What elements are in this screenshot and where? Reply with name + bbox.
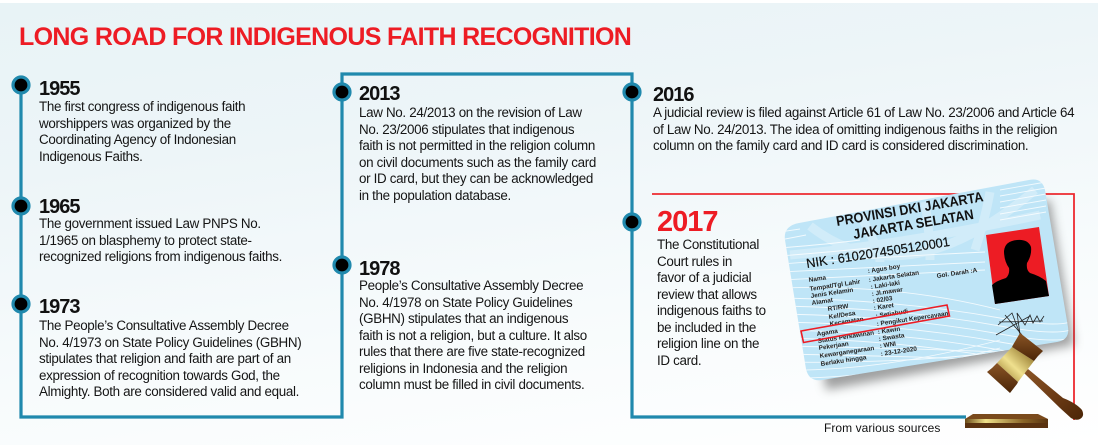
ID card illustration and gavel — [784, 180, 1084, 428]
text 2013: on civil documents such as the family card — [359, 155, 596, 170]
year 1978: 1978 — [359, 258, 400, 280]
text 2013: in the population database. — [359, 188, 511, 203]
text 1978 — [359, 278, 587, 392]
text 2017: religion line on the — [657, 336, 759, 351]
source note: From various sources — [824, 421, 940, 435]
text 1978: column must be filled in civil documents. — [359, 377, 584, 392]
event 1965 — [39, 196, 282, 264]
card fields: : Agus boy — [867, 263, 901, 275]
text 1955: The first congress of indigenous faith — [39, 99, 245, 114]
text 2017: Court rules in — [657, 254, 732, 269]
NIK number: NIK : 6102074505120001 — [805, 234, 951, 271]
text 2013: or ID card, but they can be acknowledged — [359, 171, 593, 186]
text 2017: favor of a judicial — [657, 270, 751, 285]
event 2016 — [653, 84, 1074, 153]
card fields: Jenis Kelamin — [810, 287, 854, 300]
text 1955: worshippers was organized by the — [39, 116, 231, 131]
card fields: Status Perkawinan — [817, 330, 875, 345]
card fields: : 02/03 — [872, 295, 893, 305]
card fields: : Karet — [873, 302, 895, 312]
text 1973: The People’s Consultative Assembly Decree — [39, 318, 289, 333]
card heading: JAKARTA SELATAN — [852, 206, 975, 242]
year 1965: 1965 — [39, 196, 80, 218]
card fields: : WNI — [879, 341, 897, 350]
card fields: : Setiabudi — [875, 308, 909, 320]
card fields: Agama — [816, 328, 839, 338]
text 2017: indigenous faiths to — [657, 303, 766, 318]
handle — [1024, 369, 1083, 420]
event 1955 — [39, 78, 245, 164]
year 2013: 2013 — [359, 83, 400, 105]
text 1955: Indigenous Faiths. — [39, 149, 142, 164]
brass band — [997, 347, 1034, 382]
text 1965: recognized religions from indigenous faiths. — [39, 249, 282, 264]
card fields: Alamat — [811, 297, 834, 307]
card fields: : Pengikut Kepercayaan — [876, 310, 949, 328]
text 1973: stipulates that religion and faith are part of an — [39, 351, 291, 366]
card fields: : Laki-laki — [870, 280, 901, 291]
text 1955: Coordinating Agency of Indonesian — [39, 132, 236, 147]
card fields: Kewarganegaraan — [819, 345, 875, 360]
text 1978: People’s Consultative Assembly Decree — [359, 278, 583, 293]
gavel base — [965, 414, 1048, 428]
text 1955 — [39, 99, 245, 164]
text 2013: Law No. 24/2013 on the revision of Law — [359, 105, 582, 120]
text 2017: ID card. — [657, 353, 701, 368]
text 2016: of Law No. 24/2013. The idea of omitting indigenous faiths in the religion — [653, 122, 1057, 137]
card fields: RT/RW — [827, 303, 850, 313]
text 2016: A judicial review is filed against Article 61 of Law No. 23/2006 and Article 64 — [653, 105, 1074, 120]
event 2017 — [657, 206, 766, 368]
text 1978: rules that there are five state-recognized — [359, 344, 585, 359]
text 1973: expression of recognition towards God, the — [39, 368, 280, 383]
card fields: Pekerjaan — [818, 341, 849, 352]
card fields — [808, 263, 978, 368]
text 1973 — [39, 318, 301, 399]
text 1965: 1/1965 on blasphemy to protect state- — [39, 233, 252, 248]
text 2013: No. 23/2006 stipulates that indigenous — [359, 122, 574, 137]
lower head cap — [987, 363, 1018, 393]
globe watermark — [790, 190, 1040, 262]
text 1978: faith is not a religion, but a culture. It also — [359, 328, 587, 343]
card fields: : Jl.mawar — [871, 286, 904, 298]
card fields: Gol. Darah :A — [936, 267, 978, 280]
card fields: Berlaku hingga — [820, 354, 867, 368]
year 1955: 1955 — [39, 78, 80, 100]
text 1973: Almighty. Both are considered valid and equal. — [39, 384, 299, 399]
text 1978: religions in Indonesia and the religion — [359, 361, 567, 376]
card fields: : Jakarta Selatan — [868, 270, 920, 284]
card fields: Kecamatan — [829, 316, 864, 328]
card fields: Nama — [808, 274, 827, 284]
year 2016: 2016 — [653, 84, 694, 106]
text 2013 — [359, 105, 596, 203]
photo — [986, 227, 1049, 304]
gavel — [987, 333, 1083, 420]
signature — [996, 313, 1044, 335]
text 1978: No. 4/1978 on State Policy Guidelines — [359, 295, 572, 310]
text 2017: The Constitutional — [657, 237, 759, 252]
card fields: : Kawin — [877, 326, 901, 336]
title: LONG ROAD FOR INDIGENOUS FAITH RECOGNITION — [19, 23, 631, 51]
text 2017: review that allows — [657, 287, 757, 302]
card fields: : Swasta — [878, 332, 905, 343]
event 1973 — [39, 296, 301, 399]
year 1973: 1973 — [39, 296, 80, 318]
card fields: Kel/Desa — [828, 310, 856, 321]
event 1978 — [359, 258, 587, 392]
text 2016: column on the family card and ID card is considered discrimination. — [653, 138, 1028, 153]
upper head cap — [1012, 333, 1043, 361]
text 1978: (GBHN) stipulates that an indigenous — [359, 311, 568, 326]
text 1965 — [39, 216, 282, 264]
text 1973: No. 4/1973 on State Policy Guidelines (GBHN) — [39, 335, 301, 350]
event 2013 — [359, 83, 596, 203]
text 2013: faith is not permitted in the religion column — [359, 138, 595, 153]
card — [780, 176, 1080, 386]
card shadow — [802, 200, 1074, 390]
card heading: PROVINSI DKI JAKARTA — [835, 188, 984, 229]
card fields: Tempat/Tgl Lahir — [809, 278, 861, 293]
text 2017: be included in the — [657, 320, 756, 335]
text 2016 — [653, 105, 1074, 153]
year 2017: 2017 — [657, 206, 718, 238]
wave lines — [785, 182, 1068, 378]
text 1965: The government issued Law PNPS No. — [39, 216, 261, 231]
text 2017 — [657, 237, 766, 368]
card fields: : 23-12-2020 — [880, 346, 918, 358]
religion highlight box — [801, 305, 950, 342]
card heading — [835, 188, 984, 242]
